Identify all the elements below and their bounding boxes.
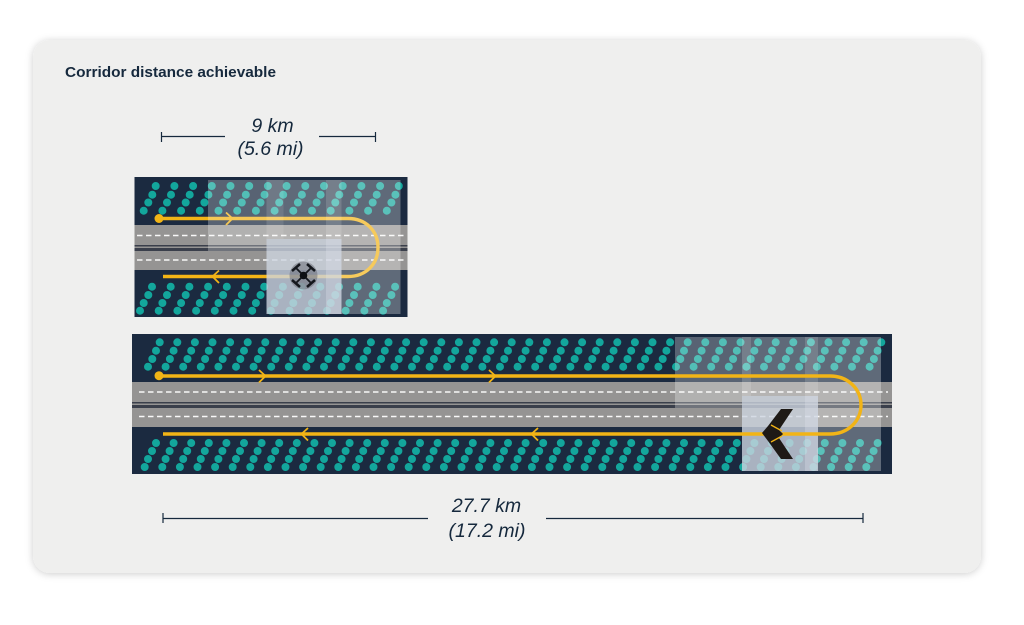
road [132,382,892,427]
heading: Corridor distance achievable [65,65,276,81]
tree rows [145,342,883,467]
sensor footprints [208,180,400,314]
ground background [134,177,408,317]
road [134,225,408,270]
label: 27.7 km (17.2 mi): (17.2 mi) [449,520,525,542]
flight path [154,212,378,283]
icon: fixed-wing drone [762,409,793,459]
label: 9 km (5.6 mi): (5.6 mi) [237,138,304,160]
label: 9 km (5.6 mi): 9 km [251,115,294,137]
tree rows [140,186,400,311]
label: 9 km (5.6 mi) [237,115,304,160]
flight path [154,370,861,440]
sensor footprints [675,337,881,471]
icon: multirotor drone [290,262,318,290]
diagram: small corridor with multirotor drone [134,177,408,317]
label: 27.7 km (17.2 mi): 27.7 km [451,495,521,517]
ruler: 9 km [162,132,376,142]
ground background [132,334,892,474]
diagram: long corridor with fixed-wing drone [132,334,892,474]
ruler: 27.7 km [163,513,863,523]
panel: card background [33,40,981,573]
label: 27.7 km (17.2 mi) [449,495,525,542]
